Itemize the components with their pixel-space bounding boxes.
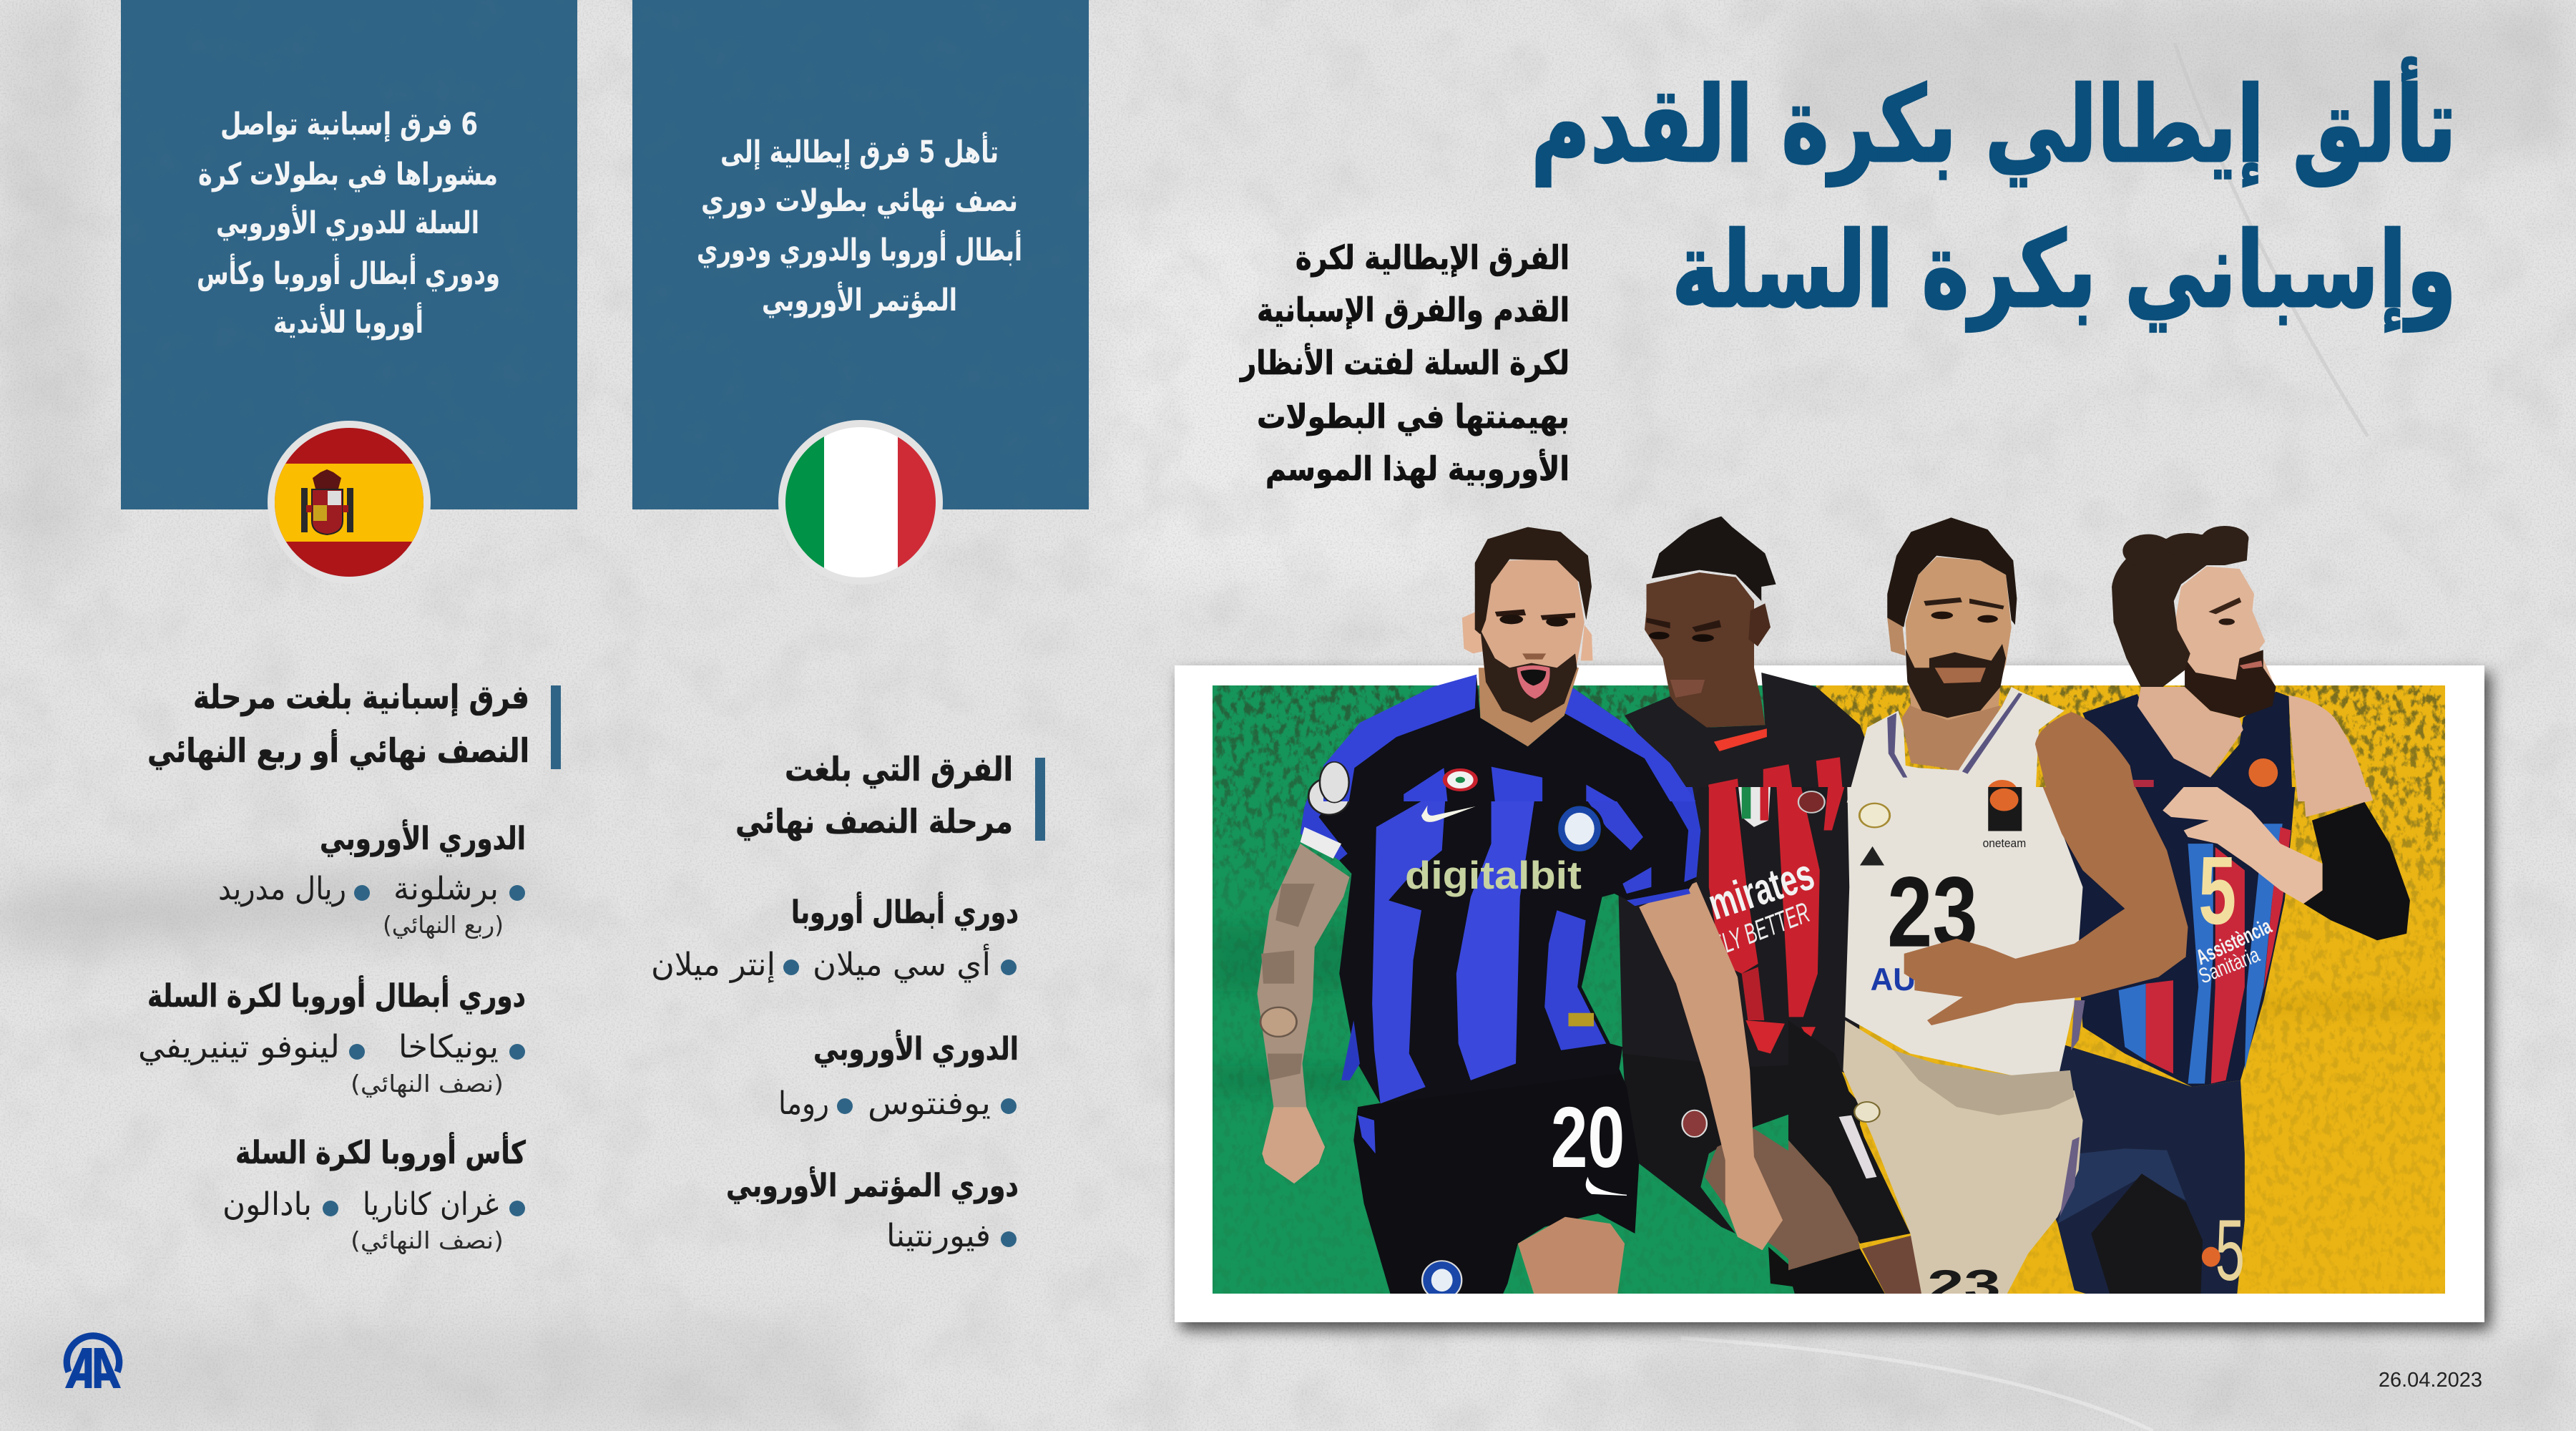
text: Italy summary: أبطال أوروبا والدوري ودوري	[697, 230, 1022, 268]
list: Conference League: فيورنتينا	[886, 1218, 991, 1254]
text: introduction: لكرة السلة لفتت الأنظار	[1239, 343, 1569, 382]
heading: Spanish teams	[147, 678, 529, 770]
photo: players collage	[1175, 517, 2484, 1322]
text: Spain summary: مشوراها في بطولات كرة	[198, 157, 498, 192]
heading: Spanish teams: فرق إسبانية بلغت مرحلة	[193, 678, 529, 717]
list: Europa League: روما	[778, 1085, 829, 1122]
list: Euroleague: ريال مدريد	[218, 871, 346, 907]
panel: Spain summary	[121, 0, 577, 509]
jersey text: Sanitaria: Sanitària	[2195, 943, 2263, 988]
list: Basketball Champions League: لينوفو تينيريفي	[138, 1029, 340, 1065]
list: EuroCup: كأس أوروبا لكرة السلة	[235, 1132, 526, 1171]
text: Spain summary: 6 فرق إسبانية تواصل	[220, 107, 478, 142]
heading: Italian teams: مرحلة النصف نهائي	[735, 802, 1013, 841]
text: Italy summary: نصف نهائي بطولات دوري	[701, 183, 1018, 219]
list: Basketball Champions League: يونيكاخا	[398, 1029, 499, 1065]
jersey sponsor: oneteam: oneteam	[1983, 837, 2026, 850]
text: introduction: بهيمنتها في البطولات	[1257, 397, 1569, 436]
jersey sponsor: digitalbit: digitalbit	[1405, 854, 1582, 898]
player: Inter Milan football	[1257, 527, 1783, 1302]
text: Spain summary	[197, 107, 500, 341]
jersey text: Assistencia: Assistència	[2193, 914, 2276, 970]
list: EuroCup	[222, 1132, 526, 1254]
list: EuroCup: بادالون	[222, 1186, 312, 1223]
logo: Anadolu Agency	[65, 1336, 121, 1388]
jersey text: Fly Better: FLY BETTER	[1708, 897, 1814, 962]
list: Basketball Champions League: دوري أبطال أوروبا لكرة السلة	[147, 975, 526, 1015]
player: AC Milan football	[1619, 517, 1927, 1302]
jersey text: Emirates: mirates	[1703, 849, 1820, 929]
shorts number: 20: 20	[1551, 1088, 1625, 1186]
list: Champions League: دوري أبطال أوروبا	[791, 892, 1019, 931]
text: Spain summary: السلة للدوري الأوروبي	[216, 204, 479, 241]
panel: Italy summary	[632, 0, 1089, 509]
text: Italy summary: المؤتمر الأوروبي	[762, 281, 957, 318]
text: Italy summary: تأهل 5 فرق إيطالية إلى	[720, 132, 999, 170]
title	[1531, 57, 2457, 332]
list: Champions League	[651, 892, 1019, 983]
list: Europa League: يوفنتوس	[868, 1085, 991, 1122]
date: 26.04.2023	[2379, 1369, 2482, 1392]
jersey number: 23: 23	[1887, 856, 1978, 967]
panel: Spanish teams list	[138, 678, 561, 1254]
heading: Italian teams	[735, 750, 1013, 841]
list: Europa League	[778, 1030, 1019, 1122]
player: Barcelona basketball: 5	[2215, 1202, 2245, 1299]
text: Italy summary	[697, 132, 1022, 318]
icon: Spanish flag	[268, 421, 431, 584]
text: Spain summary: أوروبا للأندية	[273, 302, 423, 341]
list: Europa League: الدوري الأوروبي	[813, 1030, 1019, 1068]
shorts number: 23: 23	[1927, 1261, 2001, 1309]
player: Barcelona basketball	[2049, 526, 2410, 1302]
list: EuroCup: غران كاناريا	[363, 1186, 499, 1223]
list: Basketball Champions League	[138, 975, 526, 1098]
text: introduction: القدم والفرق الإسبانية	[1257, 290, 1569, 329]
list: Euroleague: الدوري الأوروبي	[320, 819, 526, 857]
list: Conference League: دوري المؤتمر الأوروبي	[726, 1166, 1019, 1204]
list: Basketball Champions League: (نصف النهائي)	[351, 1070, 504, 1098]
jersey number: 5: 5	[2198, 836, 2236, 944]
text: introduction: الأوروبية لهذا الموسم	[1265, 449, 1569, 488]
list: Euroleague	[218, 819, 526, 939]
text: Spain summary: ودوري أبطال أوروبا وكأس	[197, 253, 500, 292]
jersey sponsor: AUTO: AUTO	[1871, 962, 1959, 997]
list: EuroCup: (نصف النهائي)	[351, 1226, 504, 1254]
heading: Spanish teams: النصف نهائي أو ربع النهائي	[147, 729, 529, 770]
text: introduction	[1239, 238, 1569, 488]
list: Conference League	[726, 1166, 1019, 1254]
panel: Italian teams list	[651, 750, 1045, 1254]
text: introduction: الفرق الإيطالية لكرة	[1296, 238, 1569, 277]
list: Euroleague: برشلونة	[393, 871, 499, 907]
icon: Italian flag	[778, 420, 943, 585]
heading: Italian teams: الفرق التي بلغت	[785, 750, 1013, 788]
list: Champions League: أي سي ميلان	[813, 944, 991, 983]
list: Euroleague: (ربع النهائي)	[383, 911, 504, 939]
player: Real Madrid basketball	[1843, 517, 2188, 1309]
list: Champions League: إنتر ميلان	[651, 947, 775, 983]
